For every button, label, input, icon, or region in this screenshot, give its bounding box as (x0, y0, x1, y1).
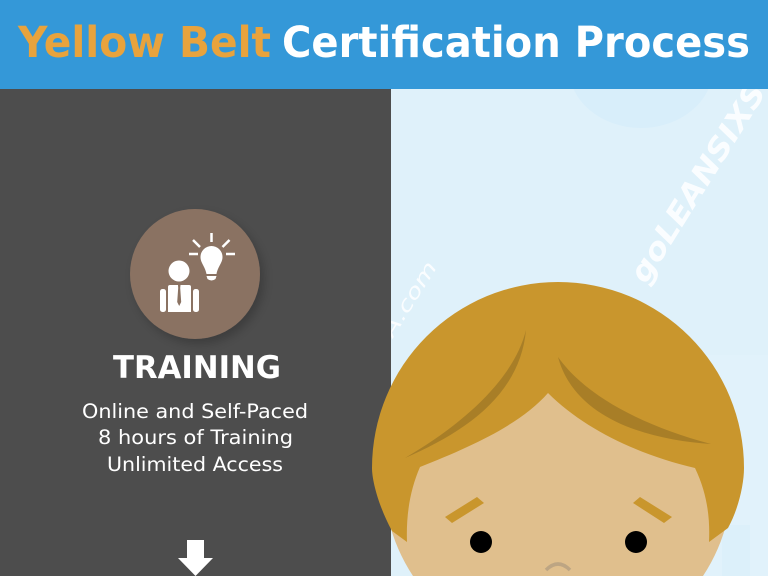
watermark: goLEANSIXS (623, 77, 768, 289)
text block: training details: Online and Self-Paced (82, 400, 308, 423)
hair strand: right (558, 357, 711, 444)
title (17, 18, 750, 68)
hair (372, 282, 744, 542)
icon: trainee with light bulb (130, 209, 260, 339)
text block: training details (82, 400, 308, 476)
eye: right (625, 531, 647, 553)
title: Yellow Belt (17, 18, 271, 68)
panel: training (0, 89, 391, 576)
heading: training: TRAINING (113, 350, 281, 386)
nose (546, 564, 570, 570)
panel: illustration background (391, 8, 768, 576)
hair strand: left (405, 330, 526, 458)
illustration: worried face (372, 282, 744, 576)
watermark: A.com (375, 257, 442, 343)
eye: left (470, 531, 492, 553)
eyebrow: left (445, 497, 484, 523)
header band (0, 0, 768, 89)
eyebrow: right (633, 497, 672, 523)
arrow: down (178, 540, 213, 576)
watermark (391, 89, 762, 339)
text block: training details: 8 hours of Training (98, 426, 293, 449)
text block: training details: Unlimited Access (107, 453, 283, 476)
face (384, 306, 732, 576)
